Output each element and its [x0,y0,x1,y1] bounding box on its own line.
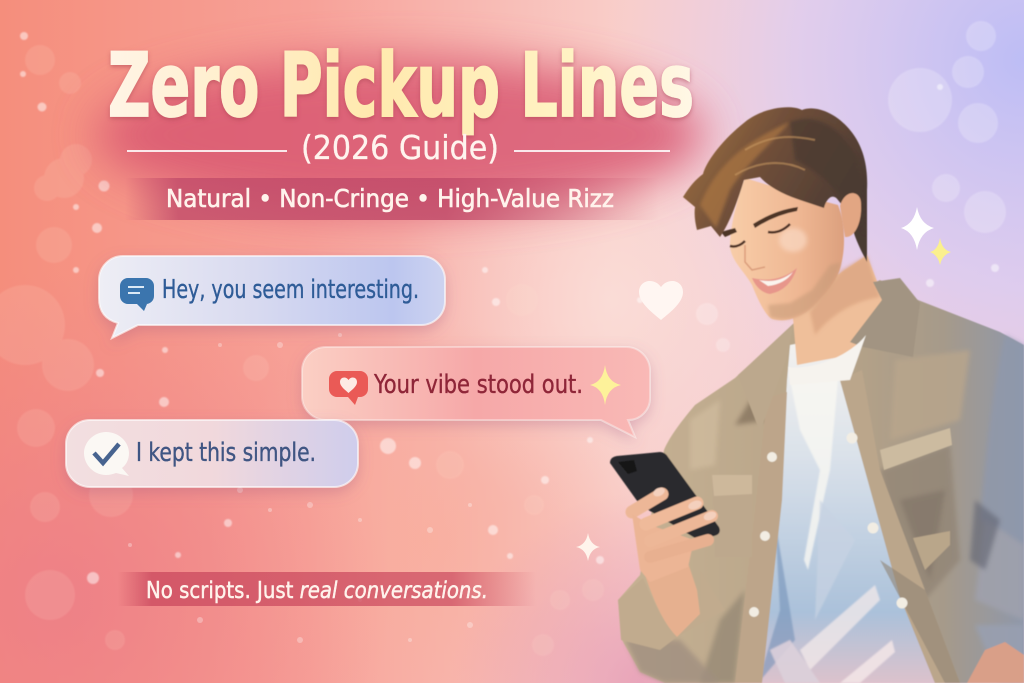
tee collar [788,335,866,385]
icon: small white sparkle [576,533,600,561]
icon: yellow sparkle [590,365,621,405]
cheek highlight [779,228,807,252]
tagline band: Natural • Non-Cringe • High-Value Rizz [166,184,614,213]
brows [721,207,798,237]
illustration: young man with phone [610,107,1024,683]
icon: blue message bubble [120,278,154,311]
t-shirt brush strokes [758,380,895,683]
bare arm at right edge [967,642,1024,683]
subtitle: 2026 Guide with rules: (2026 Guide) [301,128,499,167]
tagline band [125,178,660,220]
chat bubble: Your vibe stood out. [302,347,650,437]
neck [793,255,883,365]
bubble text: I kept this simple. [136,438,316,468]
icon: red heart message [329,371,368,405]
sleeve cuff [618,570,725,650]
t-shirt [753,330,935,683]
hand [632,486,717,582]
chat bubble: Hey, you seem interesting. [99,256,445,338]
eyes [730,224,790,246]
bubble text: Hey, you seem interesting. [162,275,419,305]
bubble text: Your vibe stood out. [373,370,583,400]
icon: small yellow sparkle [930,238,951,265]
face [730,178,844,320]
shirt pockets [712,428,952,570]
stubble shading [768,262,841,319]
title backdrop glow [95,57,705,213]
icon: white sparkle [901,207,934,250]
ear [840,193,861,237]
hair [683,107,867,262]
phone [610,452,720,538]
shirt body [618,280,1024,683]
placket and buttons [735,370,960,683]
nose shading [745,245,765,270]
title: Zero Pickup Lines [108,34,694,137]
icon: check mark bubble [84,432,129,476]
caption band [118,572,536,606]
neck shadow [810,255,880,335]
icon: white heart [639,281,683,320]
smile [752,268,797,294]
right collar [850,278,920,357]
chat bubble: I kept this simple. [66,420,358,487]
caption band: No scripts. Just real conversations. [146,578,488,604]
shadowed collar left [738,326,793,432]
forearm [645,560,700,637]
